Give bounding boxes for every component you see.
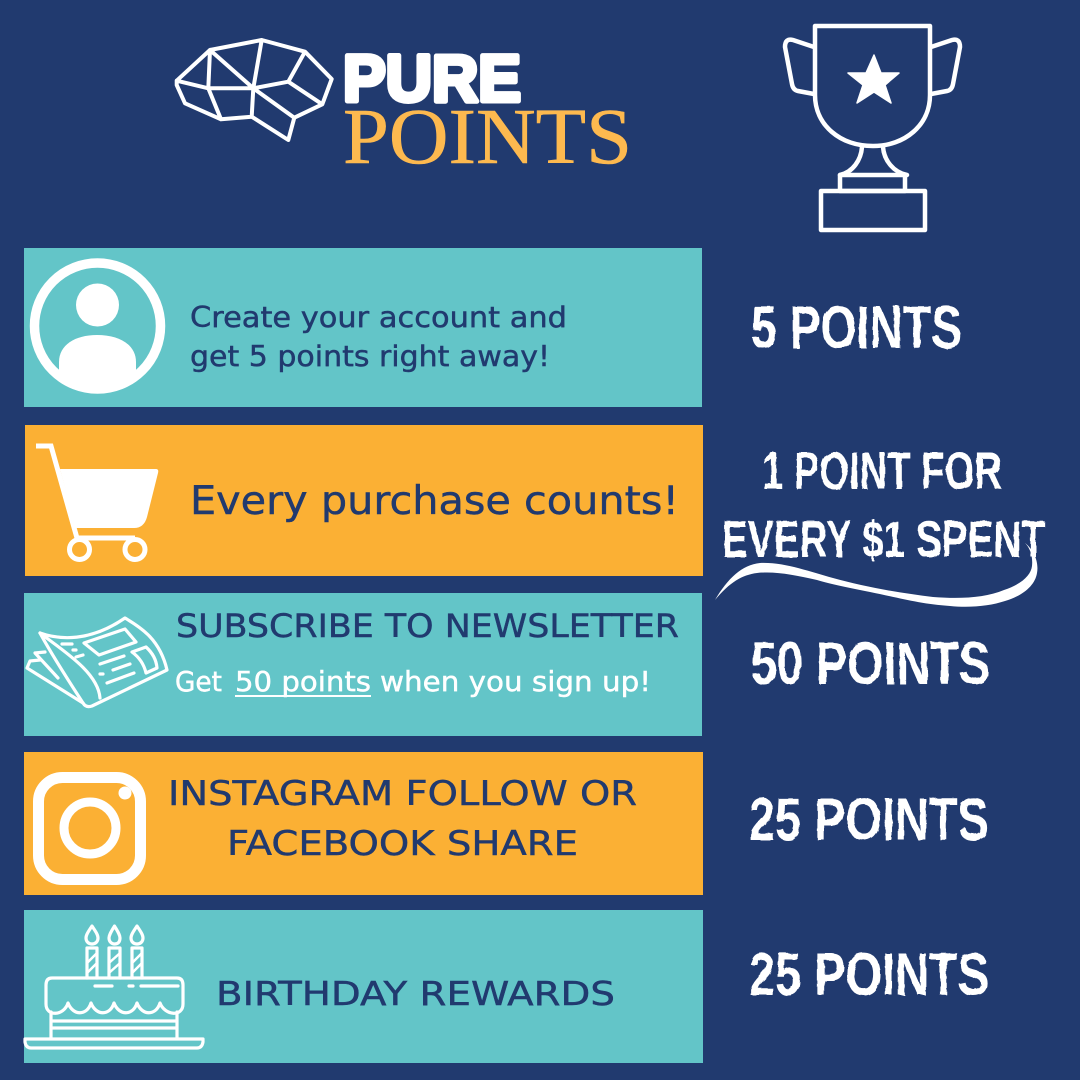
text: subscribe heading: SUBSCRIBE TO NEWSLETTER bbox=[176, 607, 679, 645]
swoosh underline bbox=[715, 543, 1037, 607]
points: 1 point for every $1 spent bbox=[715, 442, 1045, 607]
icon: instagram bbox=[38, 778, 140, 880]
panel: every purchase bbox=[25, 425, 703, 576]
points: 5 points: 5 POINTS bbox=[751, 294, 962, 361]
logo: Pure Points bbox=[177, 40, 632, 181]
icon: newspaper bbox=[27, 618, 167, 707]
icon: user avatar bbox=[34, 263, 160, 395]
text: instagram or facebook: FACEBOOK SHARE bbox=[227, 824, 578, 863]
icon: shopping cart bbox=[36, 446, 158, 560]
panel: create account bbox=[24, 248, 702, 407]
points: 50 points: 50 POINTS bbox=[751, 630, 990, 697]
text: instagram or facebook bbox=[168, 774, 637, 863]
points: 25 points instagram: 25 POINTS bbox=[749, 786, 989, 853]
panel: birthday bbox=[24, 910, 703, 1063]
icon: trophy bbox=[785, 26, 960, 230]
text: every purchase counts: Every purchase counts! bbox=[190, 478, 679, 524]
panel: social follow bbox=[24, 752, 703, 895]
text: create account: get 5 points right away! bbox=[190, 340, 550, 373]
text: create account bbox=[190, 301, 567, 373]
points: 25 points birthday: 25 POINTS bbox=[749, 941, 989, 1008]
text: birthday rewards: BIRTHDAY REWARDS bbox=[216, 974, 615, 1013]
text: get 50 points: Get bbox=[175, 666, 222, 698]
text: instagram or facebook: INSTAGRAM FOLLOW OR bbox=[168, 774, 637, 813]
text: get 50 points: 50 points bbox=[235, 666, 371, 698]
logo word: POINTS: POINTS bbox=[343, 94, 632, 181]
text: create account: Create your account and bbox=[190, 301, 567, 334]
text: get 50 points bbox=[175, 666, 651, 698]
icon: geometric brain bbox=[177, 40, 332, 140]
icon: birthday cake bbox=[25, 926, 203, 1048]
text: get 50 points: when you sign up! bbox=[380, 666, 651, 698]
logo word: PURE: PURE bbox=[343, 41, 521, 115]
panel: newsletter bbox=[24, 593, 702, 736]
